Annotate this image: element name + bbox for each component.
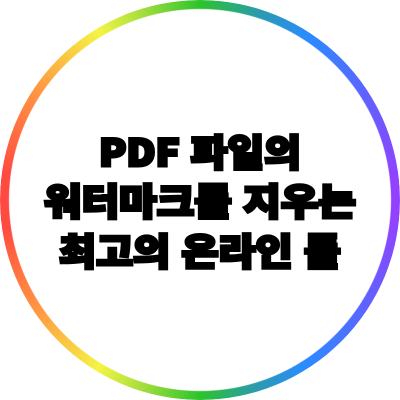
title: 최고의 온라인 툴 (59, 222, 341, 276)
title: 워터마크를 지우는 (44, 172, 356, 226)
title: PDF 파일의 (99, 123, 301, 177)
